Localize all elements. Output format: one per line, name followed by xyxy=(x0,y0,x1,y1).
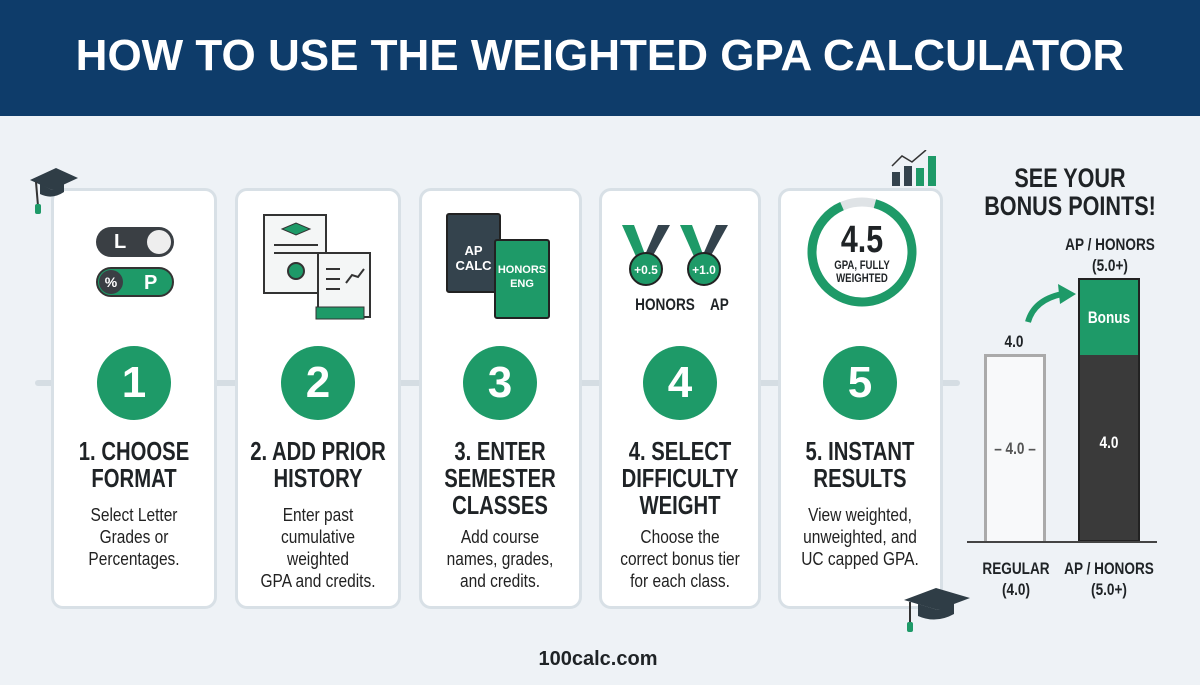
panel: step 1 xyxy=(51,188,217,609)
step titles xyxy=(79,436,189,493)
AP bar: Bonus xyxy=(1088,308,1130,327)
text: and credits. xyxy=(460,571,540,591)
icon: books: CALC xyxy=(455,258,492,273)
text: cumulative xyxy=(281,527,355,547)
icon: toggles: L xyxy=(114,231,126,253)
icon: books: ENG xyxy=(510,278,534,290)
baseline xyxy=(967,541,1157,543)
text: Add course xyxy=(461,527,539,547)
text: 4 xyxy=(668,358,692,407)
text: 2. ADD PRIOR xyxy=(250,436,386,466)
AP bar: 4.0 xyxy=(1100,433,1118,452)
AP bar xyxy=(1078,278,1140,542)
panel: step 5 xyxy=(778,188,943,609)
footer: 100calc.com xyxy=(538,648,657,670)
step titles: FORMAT xyxy=(91,463,177,493)
icon: toggles: % xyxy=(105,274,117,290)
panel: bonus chart xyxy=(967,163,1157,599)
text: DIFFICULTY xyxy=(622,463,738,493)
icon: diploma xyxy=(263,214,371,320)
icon: toggles: P xyxy=(144,272,157,294)
title: HOW TO USE THE WEIGHTED GPA CALCULATOR xyxy=(76,31,1124,80)
step descriptions: Percentages. xyxy=(88,549,180,569)
text: UC capped GPA. xyxy=(801,549,919,569)
step descriptions: Grades or xyxy=(100,527,168,547)
step descriptions xyxy=(88,505,180,569)
text: 3. ENTER xyxy=(454,436,546,466)
text: WEIGHT xyxy=(639,490,721,520)
heading: BONUS POINTS! xyxy=(984,191,1156,221)
text: Choose the xyxy=(640,527,720,547)
icon: chart top-right xyxy=(892,150,936,186)
text: for each class. xyxy=(630,571,730,591)
bar labels: (4.0) xyxy=(1002,580,1030,599)
icon: graduation cap top-left xyxy=(30,168,78,214)
step numbers: 1 xyxy=(122,358,146,407)
medal labels: HONORS AP xyxy=(635,295,729,314)
heading: SEE YOUR xyxy=(1014,163,1126,193)
panel: step 2 xyxy=(235,188,401,609)
icon: medals: +1.0 xyxy=(692,263,716,277)
top label: (5.0+) xyxy=(1092,256,1128,275)
icon: toggles xyxy=(96,227,174,297)
bar labels xyxy=(982,559,1050,599)
step titles: 1. CHOOSE xyxy=(79,436,189,466)
panel: step 4 xyxy=(599,188,761,609)
icon: gpa ring: GPA, FULLY xyxy=(834,258,890,272)
text: SEMESTER xyxy=(444,463,556,493)
timeline line xyxy=(35,380,960,386)
text: weighted xyxy=(287,549,349,569)
step descriptions: Select Letter xyxy=(91,505,177,525)
panel: bonus chart: AP / HONORS xyxy=(1064,559,1154,578)
text: unweighted, and xyxy=(803,527,917,547)
text: 5. INSTANT xyxy=(806,436,914,466)
arrow xyxy=(1025,284,1076,323)
text: 3 xyxy=(488,358,512,407)
text: names, grades, xyxy=(447,549,553,569)
heading xyxy=(984,163,1156,221)
icon: gpa ring: WEIGHTED xyxy=(836,271,888,285)
text: CLASSES xyxy=(452,490,548,520)
bar labels: REGULAR xyxy=(982,559,1050,578)
text: HISTORY xyxy=(273,463,363,493)
text: 4. SELECT xyxy=(629,436,731,466)
text: GPA and credits. xyxy=(260,571,375,591)
icon: medals: +0.5 xyxy=(634,263,658,277)
icon: medals xyxy=(622,225,728,286)
text: 2 xyxy=(306,358,330,407)
top label: AP / HONORS xyxy=(1065,235,1155,254)
panel: step 3 xyxy=(419,188,582,609)
panel: bonus chart: – 4.0 – xyxy=(994,439,1036,458)
icon: gpa ring xyxy=(808,198,916,306)
icon: gpa ring: 4.5 xyxy=(841,219,883,261)
panel: bonus chart: (5.0+) xyxy=(1091,580,1127,599)
icon: graduation cap bottom xyxy=(904,588,970,632)
text: 5 xyxy=(848,358,872,407)
step numbers xyxy=(97,346,171,420)
top label xyxy=(1065,235,1155,275)
text: correct bonus tier xyxy=(620,549,740,569)
text: RESULTS xyxy=(813,463,907,493)
text: Enter past xyxy=(283,505,353,525)
header banner xyxy=(0,0,1200,116)
icon: books xyxy=(446,213,550,319)
regular bar: 4.0 xyxy=(1005,332,1023,351)
text: View weighted, xyxy=(808,505,912,525)
icon: books: HONORS xyxy=(498,264,546,276)
icon: books: AP xyxy=(464,243,483,258)
